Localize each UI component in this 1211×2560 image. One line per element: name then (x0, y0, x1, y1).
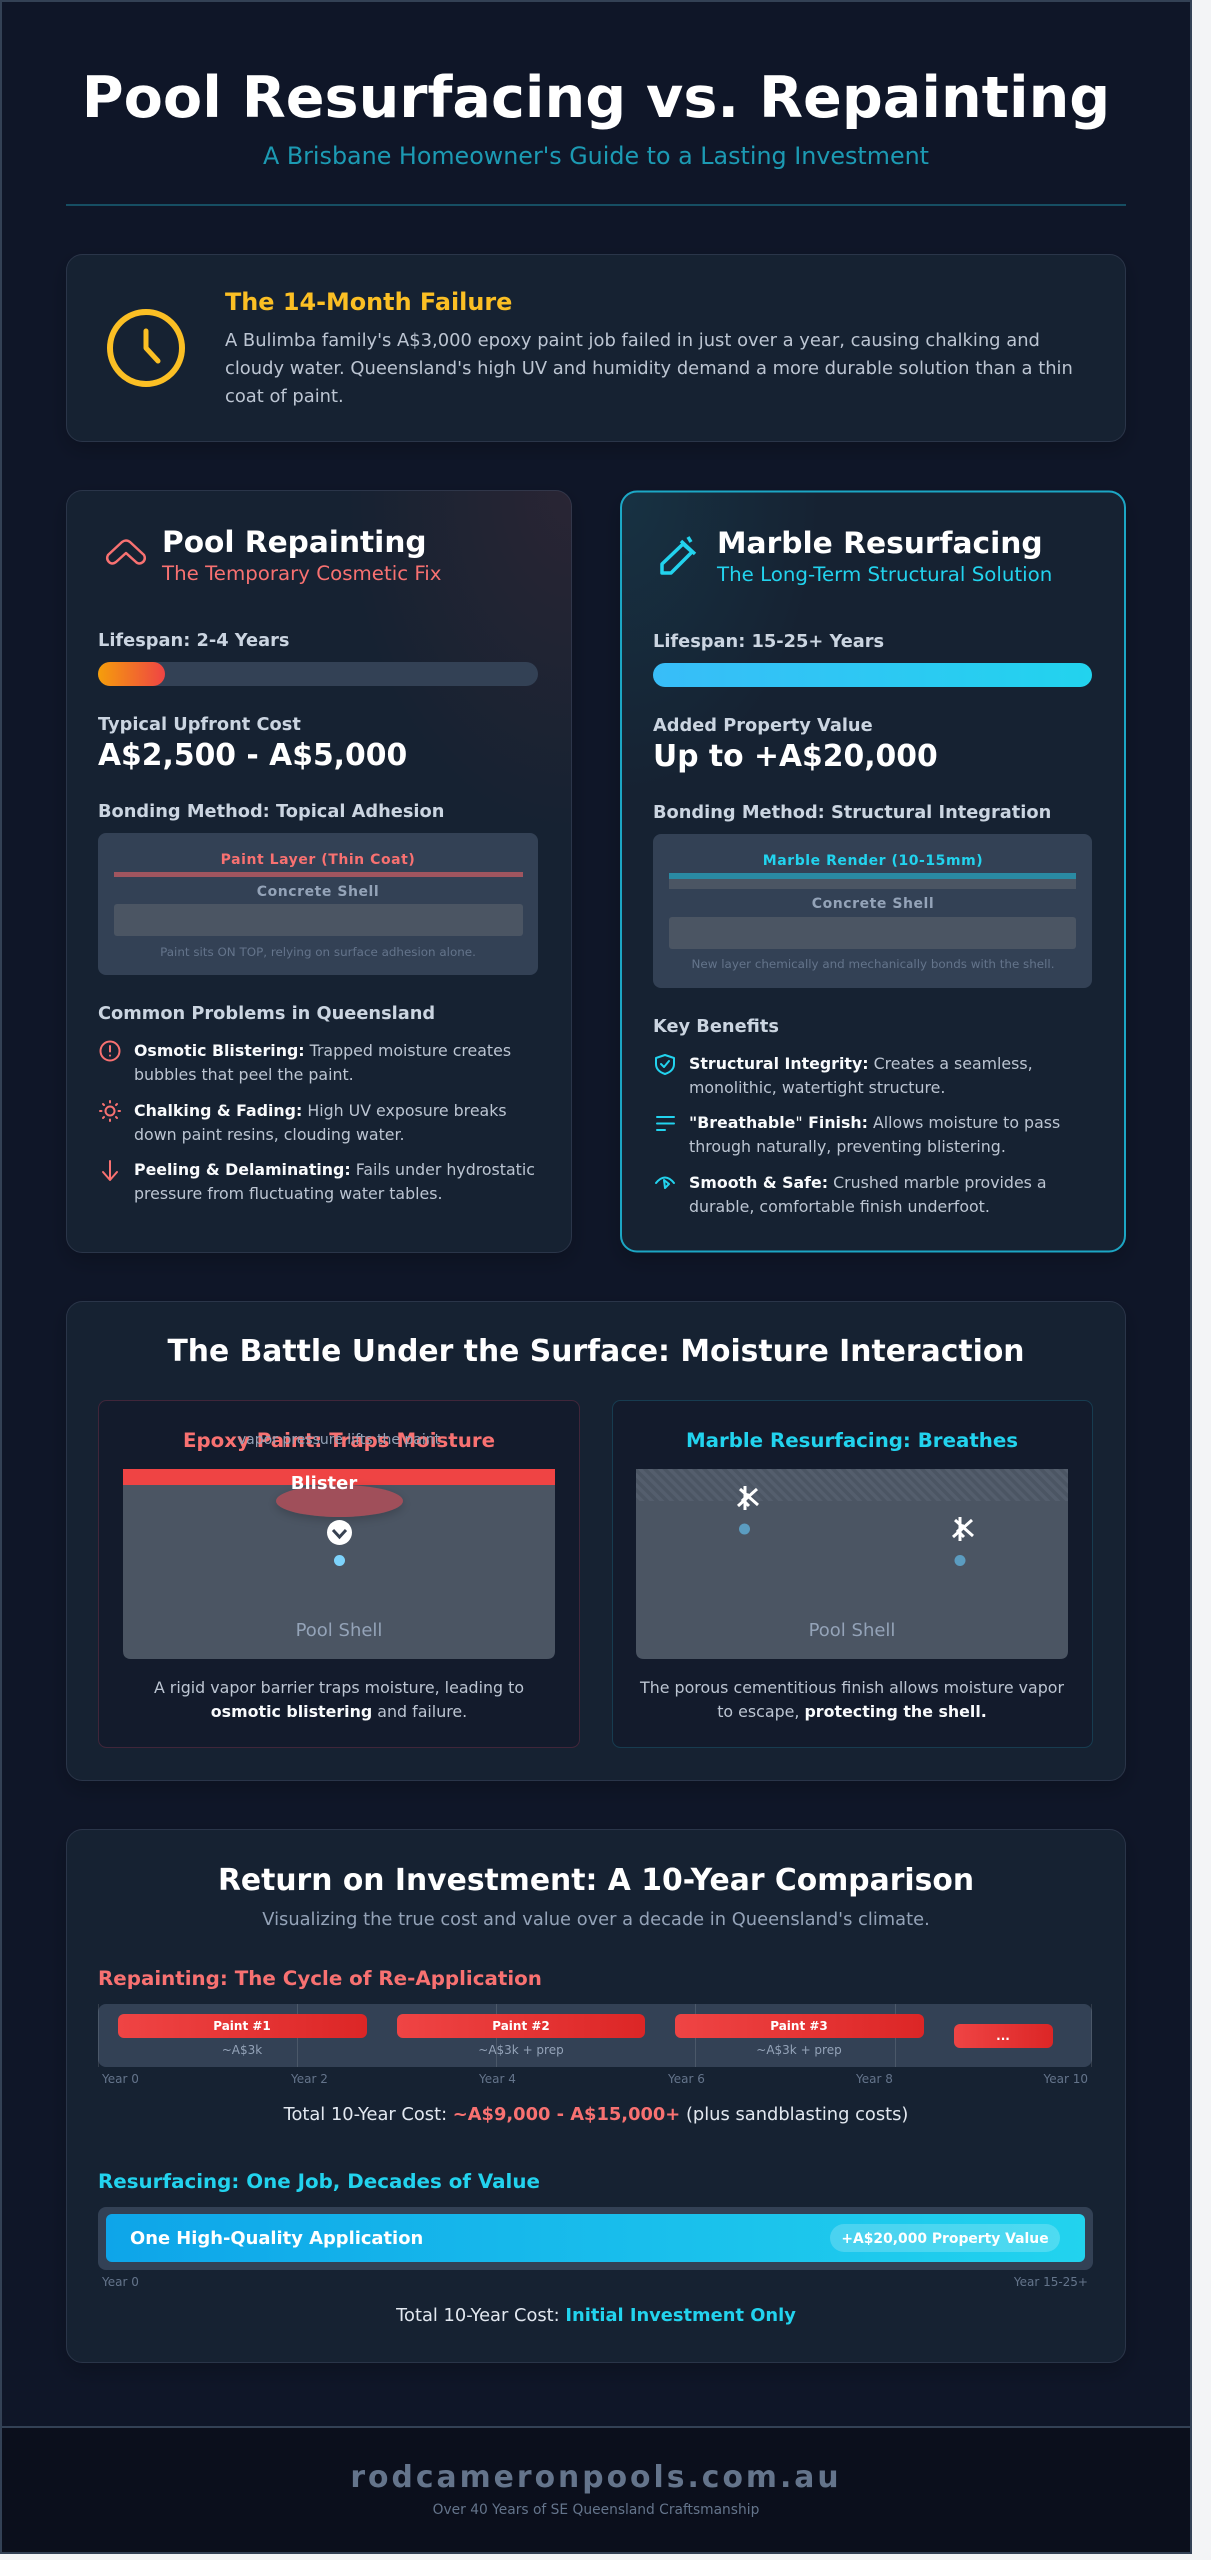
icon: pencil (662, 537, 695, 573)
bonding label: Bonding Method: Topical Adhesion (98, 801, 444, 822)
problem: chalking: down paint resins, clouding water. (134, 1125, 405, 1144)
panel: marble resurfacing (621, 492, 1125, 1252)
resurfacing timeline (98, 2207, 1093, 2270)
overlapping note: vapor pressure lifts the paint (238, 1432, 441, 1448)
sub-panel: epoxy paint (98, 1400, 580, 1748)
repainting heading: Repainting: The Cycle of Re-Application (98, 1967, 542, 1990)
callout body: A Bulimba family's A$3,000 epoxy paint job failed in just over a year, causing chalking and (225, 330, 1040, 351)
icon: lines (657, 1117, 674, 1130)
bar: paint 3 (675, 2014, 924, 2057)
benefit: breathable finish: "Breathable" Finish: Allows moisture to pass (689, 1113, 1060, 1132)
caption: A rigid vapor barrier traps moisture, leading to (154, 1678, 524, 1697)
caption: osmotic blistering and failure. (211, 1702, 467, 1721)
icon: arc (656, 1178, 674, 1188)
value label: Added Property Value (653, 715, 873, 736)
problem: osmotic blistering: Osmotic Blistering: Trapped moisture creates (134, 1041, 511, 1060)
lifespan bar (98, 662, 538, 686)
heading: Epoxy Paint: Traps Moisture (183, 1429, 495, 1452)
heading: Marble Resurfacing (717, 526, 1043, 561)
callout heading: The 14-Month Failure (225, 288, 512, 316)
timeline years: Year 10 (1042, 2072, 1088, 2086)
heading: Marble Resurfacing: Breathes (686, 1429, 1018, 1452)
bar: paint 2: Paint #2 (492, 2019, 550, 2033)
caption: to escape, protecting the shell. (717, 1702, 987, 1721)
problem: chalking (100, 1101, 507, 1144)
diagram: breathable shell: Pool Shell (809, 1620, 895, 1641)
benefit: smooth and safe: durable, comfortable finish underfoot. (689, 1197, 990, 1216)
icon: shield (656, 1055, 674, 1074)
bonding diagram: Marble Render (10-15mm) (763, 853, 983, 869)
panel: return on investment (66, 1830, 1126, 2362)
icon: paint chevron (107, 540, 145, 564)
problem: peeling: Peeling & Delaminating: Fails under hydrostatic (134, 1160, 535, 1179)
bar: paint 3: Paint #3 (770, 2019, 828, 2033)
section title: The Battle Under the Surface: Moisture Interaction (167, 1334, 1025, 1369)
heading: Pool Repainting (162, 525, 427, 559)
bonding diagram (653, 834, 1092, 988)
caption (639, 1678, 1064, 1721)
bar: paint 2: ~A$3k + prep (478, 2043, 564, 2057)
timeline years: Year 8 (855, 2072, 893, 2086)
section subtitle: Visualizing the true cost and value over a decade in Queensland's climate. (262, 1909, 930, 1930)
bar: paint 1 (118, 2014, 367, 2057)
caption (154, 1678, 524, 1721)
sub-panel: marble breathes (612, 1400, 1092, 1748)
bonding label: Bonding Method: Structural Integration (653, 802, 1051, 823)
bonding diagram: Paint Layer (Thin Coat) (221, 852, 415, 868)
bonding diagram: Concrete Shell (812, 896, 934, 912)
bar: paint 1: ~A$3k (222, 2043, 262, 2057)
callout body: cloudy water. Queensland's high UV and humidity demand a more durable solution than a thin (225, 358, 1073, 379)
benefits heading: Key Benefits (653, 1016, 779, 1037)
icon: clock (110, 312, 182, 384)
subtitle: A Brisbane Homeowner's Guide to a Lasting Investment (263, 142, 929, 170)
resurfacing years (101, 2275, 1088, 2289)
value pill: +A$20,000 Property Value (841, 2231, 1049, 2247)
benefit: structural integrity: Structural Integrity: Creates a seamless, (689, 1054, 1033, 1073)
benefit: breathable finish: through naturally, preventing blistering. (689, 1137, 1006, 1156)
icon: arrow down (103, 1161, 117, 1180)
bar: paint 3: ~A$3k + prep (756, 2043, 842, 2057)
resurfacing heading: Resurfacing: One Job, Decades of Value (98, 2170, 540, 2193)
problem: chalking: Chalking & Fading: High UV exposure breaks (134, 1101, 507, 1120)
bar: continuation: ... (996, 2029, 1010, 2043)
timeline years: Year 0 (101, 2072, 139, 2086)
bonding diagram: New layer chemically and mechanically bonds with the shell. (692, 957, 1054, 971)
repainting total: Total 10-Year Cost: ~A$9,000 - A$15,000+ (plus sandblasting costs) (283, 2104, 908, 2125)
timeline years (101, 2072, 1088, 2086)
subheading: The Long-Term Structural Solution (716, 563, 1052, 586)
bonding diagram: Paint sits ON TOP, relying on surface adhesion alone. (160, 945, 476, 959)
resurfacing years: Year 0 (101, 2275, 139, 2289)
bonding diagram: Concrete Shell (257, 884, 379, 900)
subheading: The Temporary Cosmetic Fix (161, 562, 442, 585)
lifespan label: Lifespan: 15-25+ Years (653, 631, 884, 652)
problems heading: Common Problems in Queensland (98, 1003, 435, 1024)
resurfacing total: Total 10-Year Cost: Initial Investment Only (395, 2305, 796, 2326)
panel: pool repainting (66, 490, 572, 1252)
section title: Return on Investment: A 10-Year Comparison (218, 1863, 974, 1898)
bonding diagram (98, 833, 538, 975)
diagram: paint on shell: Pool Shell (296, 1620, 382, 1641)
resurfacing timeline: One High-Quality Application (130, 2228, 423, 2249)
timeline years: Year 6 (667, 2072, 705, 2086)
panel: moisture interaction (66, 1302, 1126, 1780)
title: Pool Resurfacing vs. Repainting (82, 65, 1110, 131)
diagram: paint on shell: Blister (291, 1473, 357, 1494)
header (66, 65, 1126, 206)
diagram: breathable shell (636, 1469, 1068, 1659)
problem: peeling (103, 1160, 535, 1203)
problem: osmotic blistering (100, 1041, 511, 1084)
value pill (830, 2224, 1060, 2252)
benefit: structural integrity (656, 1054, 1033, 1097)
caption: The porous cementitious finish allows moisture vapor (639, 1678, 1064, 1697)
callout body (225, 330, 1073, 407)
panel: 14-month failure callout (66, 254, 1126, 442)
icon: alert (100, 1042, 120, 1060)
resurfacing years: Year 15-25+ (1013, 2275, 1088, 2289)
problem: peeling: pressure from fluctuating water tables. (134, 1184, 443, 1203)
callout body: coat of paint. (225, 386, 344, 407)
bar: paint 1: Paint #1 (213, 2019, 271, 2033)
tagline: Over 40 Years of SE Queensland Craftsmanship (433, 2502, 759, 2518)
benefit: smooth and safe: Smooth & Safe: Crushed marble provides a (689, 1173, 1047, 1192)
benefit: breathable finish (657, 1113, 1060, 1156)
lifespan bar (653, 663, 1092, 687)
diagram: paint on shell (123, 1469, 555, 1659)
footer (2, 2426, 1190, 2552)
repainting timeline (98, 2004, 1092, 2067)
bar: paint 2 (397, 2014, 645, 2057)
value: Up to +A$20,000 (653, 739, 938, 774)
lifespan label: Lifespan: 2-4 Years (98, 630, 289, 651)
timeline years: Year 4 (478, 2072, 516, 2086)
icon: sun (100, 1101, 120, 1121)
bar: continuation (954, 2024, 1053, 2048)
timeline years: Year 2 (290, 2072, 328, 2086)
cost label: Typical Upfront Cost (98, 714, 301, 735)
problem: osmotic blistering: bubbles that peel the paint. (134, 1065, 354, 1084)
cost value: A$2,500 - A$5,000 (98, 738, 407, 773)
benefit: structural integrity: monolithic, watertight structure. (689, 1078, 945, 1097)
website: rodcameronpools.com.au (350, 2460, 842, 2495)
benefit: smooth and safe (656, 1173, 1047, 1216)
